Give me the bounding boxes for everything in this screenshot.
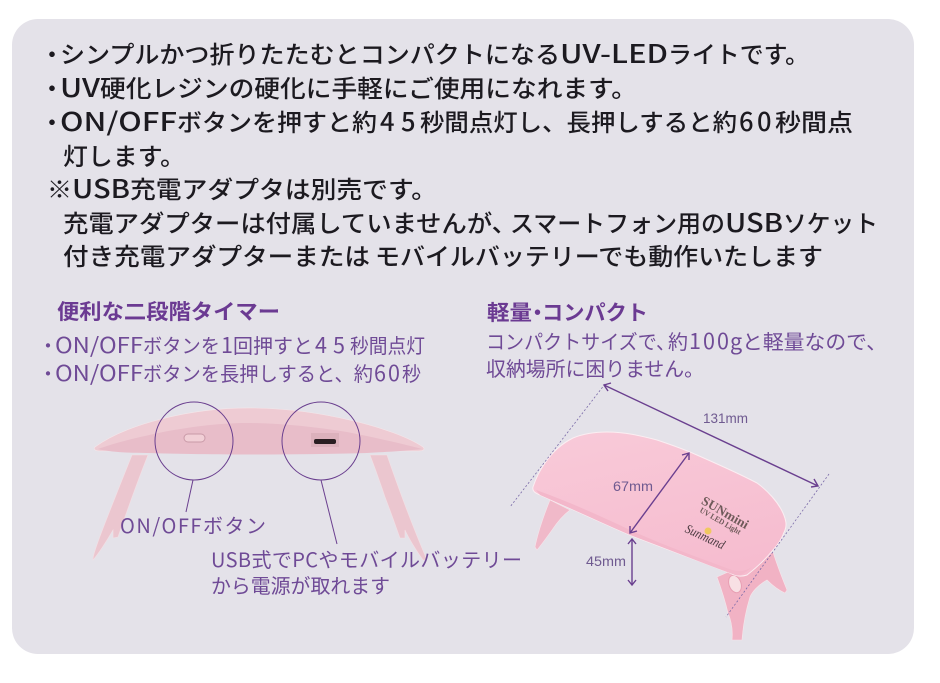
heading: lightweight compact: ・ <box>527 297 548 327</box>
text block: product description: UV <box>60 68 101 105</box>
text block: product description: ON/OFF <box>60 102 177 139</box>
text block: compact description: 100g <box>689 325 742 356</box>
heading: timer: 便利な二段階タイマー <box>57 296 280 326</box>
text block: timer description: ・ <box>38 358 58 387</box>
illustration: lamp perspective view <box>533 432 787 640</box>
text block: product description: スマートフォン用の <box>510 204 725 239</box>
dimension lines: depth 67mm: 67mm <box>613 479 653 494</box>
heading: lightweight compact <box>487 297 648 327</box>
dimension lines: height 45mm: 45mm <box>586 554 626 569</box>
text block: compact description: 約 <box>668 326 688 355</box>
text block: timer description: ・ <box>38 330 58 359</box>
front leg <box>717 552 787 640</box>
text block: product description: 45 <box>380 102 416 139</box>
text block: product description: 秒間点灯し、長押しすると約 <box>420 103 737 138</box>
text block: product description: ※ <box>47 170 72 205</box>
text block: product description: 硬化レジンの硬化に手軽にご使用になれます。 <box>100 69 637 104</box>
text block: timer description: ボタンを <box>143 330 220 359</box>
text block: product description: 付き充電アダプターまたは <box>63 237 370 272</box>
logo sun <box>704 528 712 534</box>
text block: product description: 充電アダプタは別売です。 <box>130 170 437 205</box>
heading: lightweight compact: コンパクト <box>542 297 648 327</box>
callout: usb port circle <box>282 402 360 544</box>
label: usb power <box>211 544 522 599</box>
text block: product description: ライトです。 <box>668 35 809 70</box>
illustration: lamp side view <box>93 408 427 560</box>
text block: product description: モバイルバッテリーでも動作いたします <box>375 237 823 272</box>
logo: SUNmini <box>699 493 752 532</box>
callout: on/off button circle <box>155 402 233 512</box>
heading: lightweight compact: 軽量 <box>487 297 532 327</box>
dimension lines: width 131mm: 131mm <box>703 411 748 426</box>
text block: compact description: と軽量なので、 <box>742 326 887 355</box>
text block: timer description: 60 <box>374 357 400 388</box>
text block: timer description: 秒 <box>402 358 421 387</box>
text block: product description: 灯します。 <box>63 137 185 172</box>
usb port <box>311 433 339 447</box>
text block: compact description: 収納場所に困りません。 <box>486 353 704 382</box>
label: on/off button: ON/OFFボタン <box>120 510 266 539</box>
shell lower edge shading <box>536 490 752 575</box>
text block: compact description: コンパクトサイズで、 <box>486 326 675 355</box>
dimension lines: height 45mm <box>586 539 636 585</box>
text block: compact description <box>486 325 887 382</box>
text block: timer description: ボタンを長押しすると、約 <box>143 358 373 387</box>
text block: product description: ボタンを押すと約 <box>177 103 377 138</box>
shell <box>533 432 786 576</box>
logo script: Sunmand <box>683 521 728 552</box>
leg hole <box>726 573 744 595</box>
dimension lines: depth 67mm <box>613 453 689 533</box>
text block: product description: UV-LED <box>560 34 668 71</box>
text block: product description: USB <box>725 203 783 240</box>
logo: UV LED Light <box>698 506 743 537</box>
text block: product description: 秒間点 <box>775 103 853 138</box>
text block: product description: シンプルかつ折りたたむとコンパクトになる <box>60 35 560 70</box>
text block: timer description: 45 <box>315 329 345 360</box>
text block: product description: ・ <box>40 69 64 104</box>
lamp body <box>98 423 422 454</box>
label: usb power: USB式でPCやモバイルバッテリー <box>211 544 522 573</box>
label: usb power: から電源が取れます <box>211 570 390 599</box>
lamp top shell <box>94 408 424 451</box>
dimension lines: width 131mm <box>510 383 829 617</box>
text block: timer description <box>38 329 425 388</box>
text block: timer description: 1 <box>221 329 233 360</box>
text block: product description: USB <box>72 169 130 206</box>
text block: product description: 60 <box>739 102 772 139</box>
button <box>184 434 205 442</box>
text block: product description: ・ <box>40 35 64 70</box>
text block: product description <box>40 34 878 272</box>
text block: timer description: 秒間点灯 <box>350 330 425 359</box>
text block: product description: ソケット <box>783 204 878 239</box>
rear leg <box>535 500 570 550</box>
text block: timer description: ON/OFF <box>55 329 143 360</box>
text block: timer description: 回押すと <box>233 330 313 359</box>
text block: timer description: ON/OFF <box>55 357 143 388</box>
text block: product description: 充電アダプターは付属していませんが、 <box>63 204 517 239</box>
right leg <box>370 455 427 560</box>
text block: product description: ・ <box>40 103 64 138</box>
left leg <box>93 455 148 560</box>
